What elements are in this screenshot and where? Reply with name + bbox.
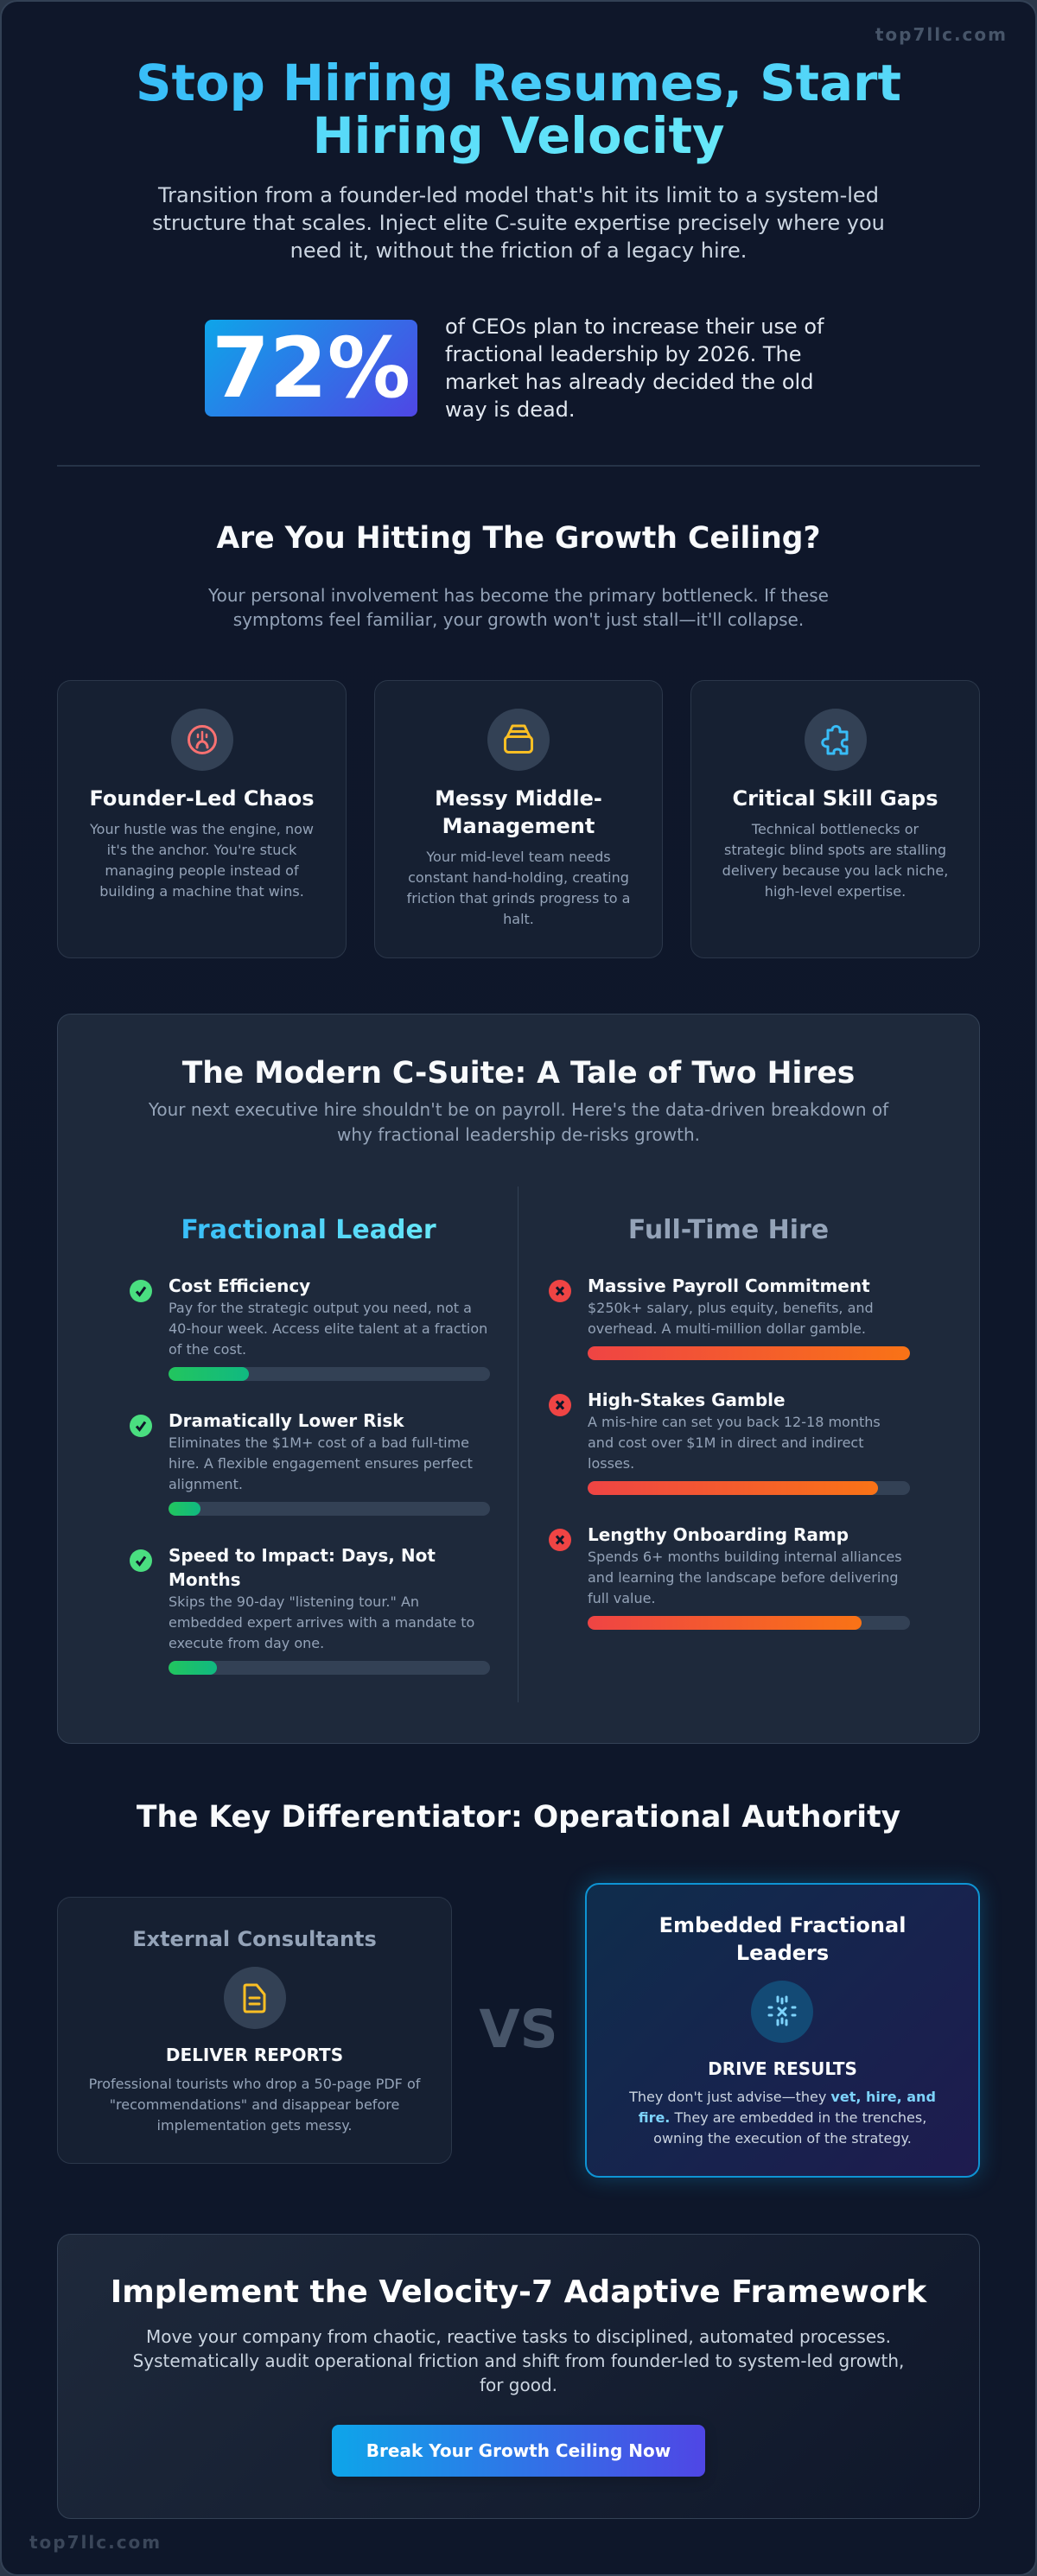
column: full-time hire bbox=[549, 1215, 910, 1630]
heading: key differentiator: The Key Differentiator: Operational Authority bbox=[137, 1800, 900, 1835]
icon: cross bbox=[549, 1280, 571, 1302]
stat description: fractional leadership by 2026. The bbox=[445, 342, 802, 366]
card text bbox=[629, 2089, 936, 2147]
item text: Spends 6+ months building internal alliances bbox=[588, 1549, 902, 1565]
item text: A mis-hire can set you back 12-18 months bbox=[588, 1414, 881, 1430]
panel: comparison bbox=[57, 1014, 980, 1744]
stat description: of CEOs plan to increase their use of bbox=[445, 315, 824, 339]
card text: fire. They are embedded in the trenches, bbox=[639, 2109, 926, 2126]
card text: Professional tourists who drop a 50-page PDF of bbox=[89, 2076, 420, 2092]
panel: critical skill gaps bbox=[690, 680, 980, 958]
comparison intro: Your next executive hire shouldn't be on payroll. Here's the data-driven breakdown of bbox=[149, 1099, 888, 1120]
card text: Technical bottlenecks or bbox=[752, 821, 919, 837]
item text: hire. A flexible engagement ensures perfect bbox=[169, 1455, 473, 1472]
stat description bbox=[445, 315, 824, 422]
item text: Skips the 90-day "listening tour." An bbox=[169, 1593, 419, 1610]
card subtitle: DELIVER REPORTS bbox=[166, 2045, 343, 2065]
item text: execute from day one. bbox=[169, 1635, 324, 1651]
column heading: Full-Time Hire bbox=[628, 1215, 829, 1245]
cta button bbox=[332, 2425, 705, 2477]
panel: embedded fractional leaders bbox=[585, 1883, 980, 2178]
comparison intro: why fractional leadership de-risks growth. bbox=[337, 1123, 700, 1144]
growth ceiling intro bbox=[208, 585, 829, 630]
stat description: market has already decided the old bbox=[445, 370, 813, 394]
item text: Eliminates the $1M+ cost of a bad full-time bbox=[169, 1434, 469, 1451]
title: Stop Hiring Resumes, Start bbox=[136, 54, 901, 112]
card title: Leaders bbox=[736, 1941, 829, 1965]
card text: managing people instead of bbox=[105, 862, 299, 879]
icon: cross bbox=[549, 1394, 571, 1416]
subtitle: structure that scales. Inject elite C-suite expertise precisely where you bbox=[152, 211, 885, 235]
item title bbox=[169, 1545, 436, 1590]
card text: implementation gets messy. bbox=[157, 2117, 352, 2134]
card text bbox=[90, 821, 314, 900]
comparison intro bbox=[149, 1099, 889, 1144]
card text bbox=[407, 849, 630, 927]
cta text bbox=[133, 2326, 904, 2395]
subtitle: need it, without the friction of a legacy hire. bbox=[290, 239, 747, 263]
card title bbox=[659, 1913, 906, 1965]
card text: friction that grinds progress to a bbox=[407, 890, 630, 906]
cta text: for good. bbox=[480, 2375, 557, 2395]
icon: check bbox=[130, 1415, 152, 1437]
heading: growth ceiling: Are You Hitting The Growth Ceiling? bbox=[217, 521, 820, 556]
watermark top: top7llc.com bbox=[875, 24, 1008, 45]
panel: external consultants bbox=[57, 1897, 452, 2164]
item text bbox=[588, 1300, 874, 1337]
card title: External Consultants bbox=[132, 1927, 377, 1951]
card text bbox=[722, 821, 948, 900]
card text: strategic blind spots are stalling bbox=[724, 842, 946, 858]
item text: of the cost. bbox=[169, 1341, 246, 1358]
comparison heading: The Modern C-Suite: A Tale of Two Hires bbox=[182, 1056, 855, 1091]
item text: losses. bbox=[588, 1455, 634, 1472]
item title: Dramatically Lower Risk bbox=[169, 1410, 404, 1431]
item title: Cost Efficiency bbox=[169, 1275, 310, 1296]
score bar bbox=[169, 1367, 490, 1381]
item text bbox=[588, 1549, 902, 1606]
icon: document bbox=[224, 1967, 286, 2029]
score bar bbox=[169, 1502, 490, 1516]
cta text: Systematically audit operational friction and shift from founder-led to system-led growth, bbox=[133, 2350, 904, 2371]
score bar bbox=[588, 1346, 910, 1360]
item title: Speed to Impact: Days, Not bbox=[169, 1545, 436, 1566]
card title: Critical Skill Gaps bbox=[732, 786, 938, 811]
item text: full value. bbox=[588, 1590, 656, 1606]
item text bbox=[588, 1414, 881, 1472]
card text: Your hustle was the engine, now bbox=[90, 821, 314, 837]
item title: Months bbox=[169, 1569, 241, 1590]
item text: alignment. bbox=[169, 1476, 243, 1492]
item text bbox=[169, 1434, 473, 1492]
card text: Your mid-level team needs bbox=[426, 849, 611, 865]
card text bbox=[89, 2076, 421, 2134]
item text: $250k+ salary, plus equity, benefits, and bbox=[588, 1300, 874, 1316]
card text: it's the anchor. You're stuck bbox=[107, 842, 296, 858]
item text: Pay for the strategic output you need, not a bbox=[169, 1300, 472, 1316]
item text bbox=[169, 1593, 474, 1651]
item title: High-Stakes Gamble bbox=[588, 1390, 786, 1410]
card text: high-level expertise. bbox=[765, 883, 906, 900]
item text bbox=[169, 1300, 487, 1358]
stat description: way is dead. bbox=[445, 398, 576, 422]
card title: Management bbox=[442, 814, 595, 838]
icon: check bbox=[130, 1549, 152, 1572]
panel: founder-led chaos bbox=[57, 680, 347, 958]
card title: Founder-Led Chaos bbox=[89, 786, 315, 811]
stat: 72%: 72% bbox=[212, 320, 410, 417]
title: Hiring Velocity bbox=[312, 107, 725, 165]
cta button: Break Your Growth Ceiling Now bbox=[366, 2440, 671, 2461]
card title: Messy Middle- bbox=[435, 786, 602, 811]
card title: Embedded Fractional bbox=[659, 1913, 906, 1937]
card title bbox=[435, 786, 602, 838]
icon: stacked box bbox=[487, 709, 550, 771]
card text: "recommendations" and disappear before bbox=[110, 2096, 399, 2113]
panel: messy middle-management bbox=[374, 680, 663, 958]
item text: overhead. A multi-million dollar gamble. bbox=[588, 1320, 866, 1337]
icon: expert node bbox=[751, 1981, 813, 2043]
card text: constant hand-holding, creating bbox=[408, 869, 629, 886]
icon: cross bbox=[549, 1529, 571, 1551]
card text: They don't just advise—they vet, hire, and bbox=[629, 2089, 936, 2105]
card text: building a machine that wins. bbox=[99, 883, 304, 900]
score bar bbox=[169, 1661, 490, 1675]
item text: and learning the landscape before delivering bbox=[588, 1569, 899, 1586]
icon: check bbox=[130, 1280, 152, 1302]
item text: embedded expert arrives with a mandate to bbox=[169, 1614, 474, 1631]
watermark bottom: top7llc.com bbox=[29, 2532, 162, 2553]
subtitle: Transition from a founder-led model that's hit its limit to a system-led bbox=[158, 183, 879, 207]
cta text: Move your company from chaotic, reactive tasks to disciplined, automated processes. bbox=[146, 2326, 891, 2347]
card text: delivery because you lack niche, bbox=[722, 862, 948, 879]
growth ceiling intro: Your personal involvement has become the primary bottleneck. If these bbox=[208, 585, 829, 606]
card subtitle: DRIVE RESULTS bbox=[708, 2058, 857, 2079]
column heading: Fractional Leader bbox=[181, 1215, 436, 1245]
item text: and cost over $1M in direct and indirect bbox=[588, 1434, 864, 1451]
card text: halt. bbox=[503, 911, 534, 927]
score bar bbox=[588, 1481, 910, 1495]
item text: 40-hour week. Access elite talent at a fraction bbox=[169, 1320, 487, 1337]
subtitle bbox=[152, 183, 885, 263]
icon: sad face bbox=[171, 709, 233, 771]
versus label: VS bbox=[479, 1999, 558, 2060]
growth ceiling intro: symptoms feel familiar, your growth won't just stall—it'll collapse. bbox=[233, 609, 804, 630]
column: fractional leader bbox=[130, 1215, 490, 1675]
item title: Massive Payroll Commitment bbox=[588, 1275, 870, 1296]
icon: puzzle piece bbox=[805, 709, 867, 771]
cta heading: Implement the Velocity-7 Adaptive Framework bbox=[111, 2274, 926, 2310]
item title: Lengthy Onboarding Ramp bbox=[588, 1524, 849, 1545]
title bbox=[136, 54, 901, 165]
score bar bbox=[588, 1616, 910, 1630]
panel: call to action bbox=[57, 2234, 980, 2519]
card text: owning the execution of the strategy. bbox=[653, 2130, 912, 2147]
